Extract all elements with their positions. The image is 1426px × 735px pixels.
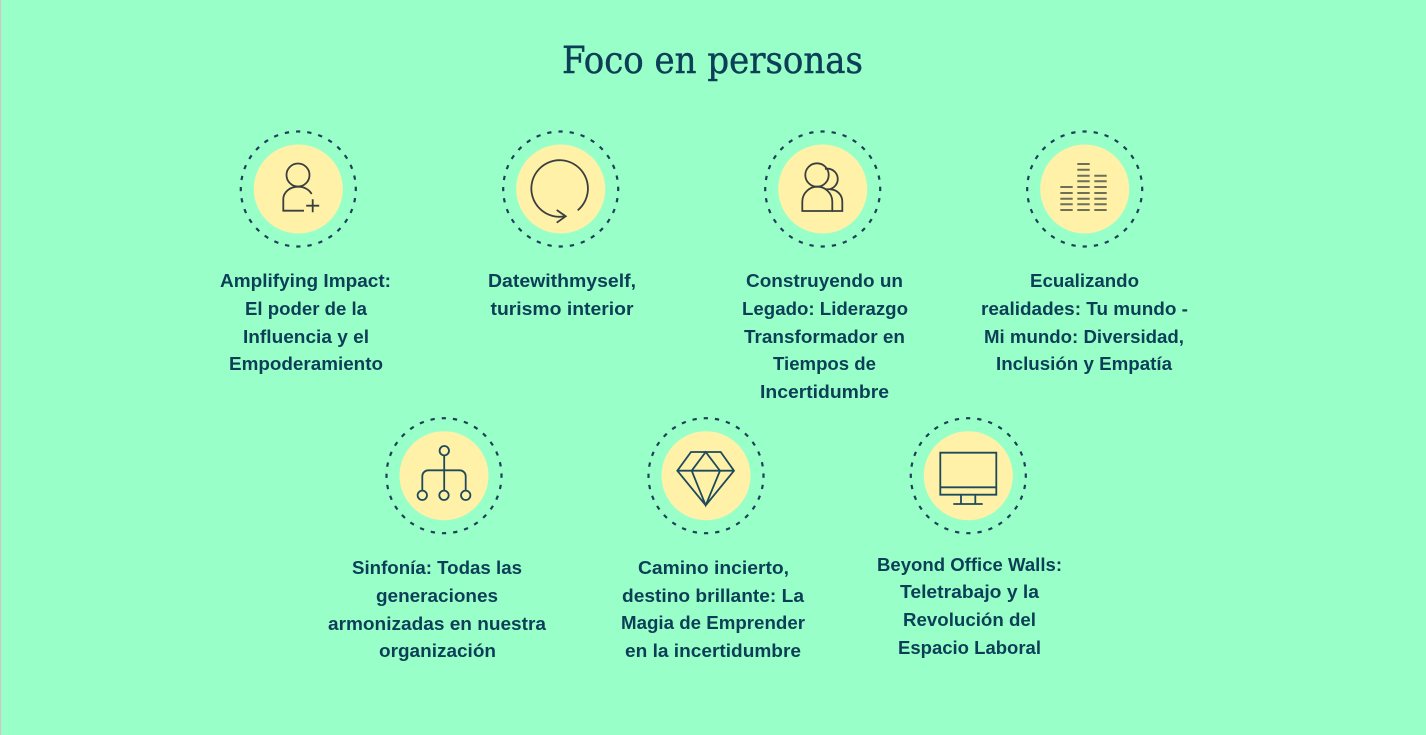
text: Sinfonía: Sinfonía: Todas las xyxy=(352,558,522,578)
panel: Beyond Office Walls xyxy=(877,418,1062,658)
text: Sinfonía: generaciones xyxy=(376,586,498,606)
icon: person with plus xyxy=(241,132,356,246)
text: Datewithmyself: Datewithmyself, xyxy=(488,271,636,291)
text: Construyendo un Legado: Incertidumbre xyxy=(760,382,889,402)
text: Camino incierto: en la incertidumbre xyxy=(625,641,801,661)
text: Beyond Office Walls: Teletrabajo y la xyxy=(900,582,1040,602)
text: Amplifying Impact: Empoderamiento xyxy=(229,354,383,374)
text: Construyendo un Legado: Tiempos de xyxy=(773,354,876,374)
panel: Datewithmyself xyxy=(488,132,636,319)
text: Construyendo un Legado: Transformador en xyxy=(744,327,905,347)
text: Sinfonía: armonizadas en nuestra xyxy=(328,614,547,634)
text: Beyond Office Walls: Espacio Laboral xyxy=(898,638,1041,658)
text: Camino incierto: Camino incierto, xyxy=(638,558,789,578)
panel: Construyendo un Legado xyxy=(742,132,908,402)
text: Ecualizando realidades: realidades: Tu mundo - xyxy=(981,299,1188,319)
text: Ecualizando realidades: Inclusión y Empatía xyxy=(996,354,1173,374)
title: Foco en personas xyxy=(562,39,863,82)
text: Beyond Office Walls: Beyond Office Walls: xyxy=(877,555,1062,575)
icon: monitor xyxy=(911,418,1026,533)
text: Amplifying Impact: Amplifying Impact: xyxy=(220,271,391,291)
text: Construyendo un Legado: Construyendo un xyxy=(746,271,903,291)
text: Amplifying Impact xyxy=(220,271,391,374)
text: Datewithmyself xyxy=(488,271,636,319)
text: Sinfonía: organización xyxy=(379,641,496,661)
text: Ecualizando realidades xyxy=(981,271,1188,374)
text: Camino incierto: destino brillante: La xyxy=(622,586,805,606)
text: Beyond Office Walls: Revolución del xyxy=(903,610,1036,630)
panel: Amplifying Impact xyxy=(220,132,391,374)
text: Datewithmyself: turismo interior xyxy=(490,299,634,319)
text: Beyond Office Walls xyxy=(877,555,1062,658)
panel: Sinfonía xyxy=(328,418,547,661)
text: Ecualizando realidades: Ecualizando xyxy=(1030,271,1139,291)
text: Camino incierto xyxy=(621,558,805,661)
text: Amplifying Impact: El poder de la xyxy=(245,299,368,319)
panel: Camino incierto xyxy=(621,418,805,661)
text: Amplifying Impact: Influencia y el xyxy=(243,327,369,347)
text: Sinfonía xyxy=(328,558,547,661)
icon: two people xyxy=(765,132,880,246)
text: Construyendo un Legado xyxy=(742,271,908,402)
text: Ecualizando realidades: Mi mundo: Diversidad, xyxy=(984,327,1184,347)
icon: equalizer bars xyxy=(1027,132,1142,246)
icon: org chart xyxy=(386,418,502,533)
icon: diamond xyxy=(648,418,764,533)
icon: circular arrow xyxy=(503,132,618,246)
panel: Ecualizando realidades xyxy=(981,132,1188,374)
text: Construyendo un Legado: Legado: Liderazgo xyxy=(742,299,908,319)
text: Camino incierto: Magia de Emprender xyxy=(621,613,805,633)
